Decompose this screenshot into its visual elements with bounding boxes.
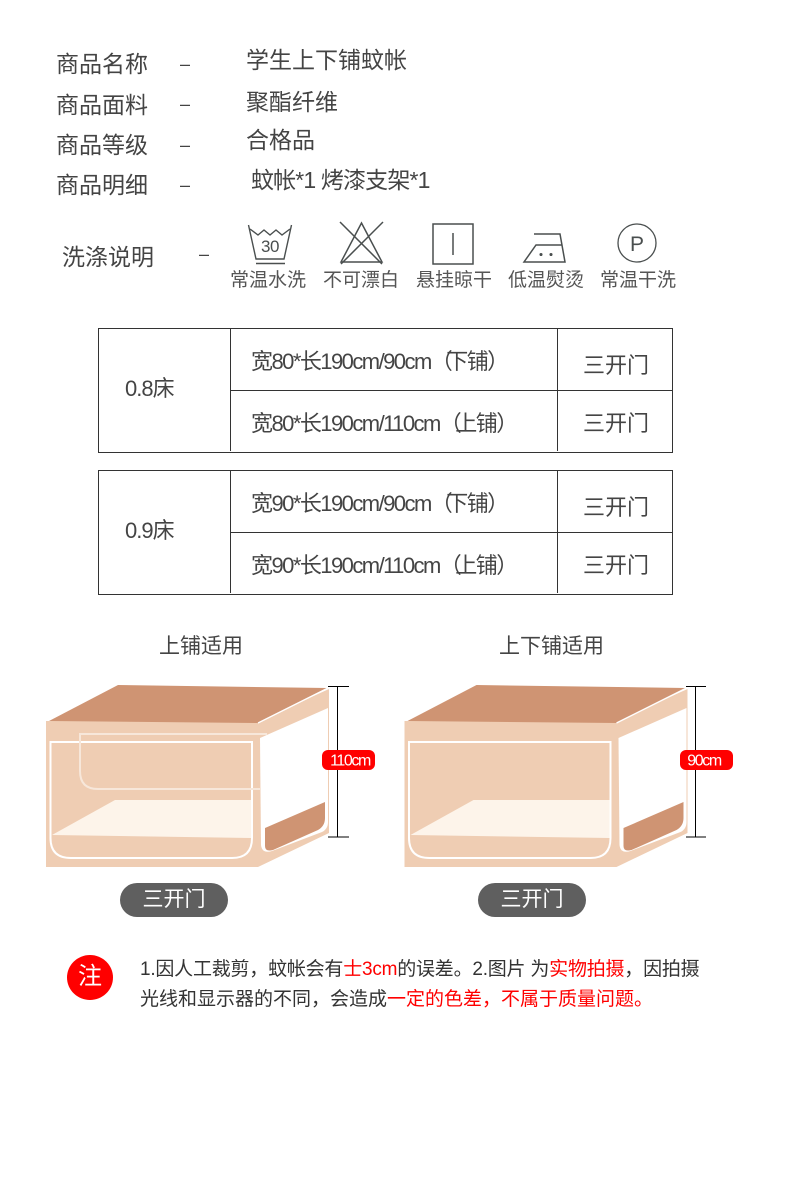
icon: no bleach (340, 222, 383, 264)
note line 2: 光线和显示器的不同，会造成一定的色差，不属于质量问题。 (140, 989, 653, 1010)
washing instructions label: 洗涤说明 (62, 244, 154, 270)
product info list (56, 47, 430, 198)
bed size 0.8: 0.8床 (125, 376, 174, 401)
row: grade value: 合格品 (246, 127, 315, 153)
row: grade dash: – (180, 135, 190, 155)
size table 0.9 (98, 470, 673, 595)
icon: wash tub: 30 (261, 237, 279, 256)
caption: hang dry: 悬挂晾干 (416, 270, 492, 291)
badge: three doors right (478, 883, 586, 917)
icon: dry clean P (618, 224, 656, 262)
diagrams (46, 685, 733, 867)
heading: upper bunk: 上铺适用 (159, 635, 243, 658)
row: name label: 商品名称 (56, 51, 148, 77)
icon: low iron (524, 234, 565, 262)
icon: wash tub (248, 225, 292, 264)
row: fabric label: 商品面料 (56, 92, 148, 118)
door type upper: 三开门 (583, 411, 649, 436)
lower bunk size: 宽90*长190cm/90cm（下铺） (251, 491, 508, 516)
dimension: 90cm (680, 686, 733, 837)
diagram: upper bunk net (46, 685, 329, 867)
note text (140, 958, 699, 1010)
washing dash: – (199, 244, 209, 264)
upper bunk size: 宽90*长190cm/110cm（上铺） (251, 553, 517, 578)
badge: three doors left (120, 883, 228, 917)
icon: hang dry (433, 224, 473, 264)
caption: low iron: 低温熨烫 (508, 270, 584, 291)
row: grade label: 商品等级 (56, 132, 148, 158)
note icon (67, 955, 113, 1000)
dimension: 110cm: 110cm (330, 752, 371, 770)
caption: normal temp wash: 常温水洗 (230, 270, 306, 291)
icon: dry clean P: P (630, 233, 644, 256)
row: contents dash: – (180, 175, 190, 195)
diagram: full bunk net (404, 685, 688, 867)
badge: three doors right: 三开门 (500, 888, 564, 911)
size table 0.8 (98, 328, 673, 453)
note line 1: 1.因人工裁剪，蚊帐会有士3cm的误差。2.图片 为实物拍摄，因拍摄 (140, 959, 699, 980)
row: contents label: 商品明细 (56, 172, 148, 198)
upper bunk size: 宽80*长190cm/110cm（上铺） (251, 411, 517, 436)
dimension: 90cm: 90cm (687, 752, 722, 770)
washing icons (248, 222, 657, 265)
row: fabric dash: – (180, 94, 190, 114)
row: name dash: – (180, 54, 190, 74)
door type lower: 三开门 (583, 495, 649, 520)
note icon: 注 (78, 963, 102, 990)
row: name value: 学生上下铺蚊帐 (246, 47, 407, 73)
row: contents value: 蚊帐*1 烤漆支架*1 (251, 167, 430, 193)
heading: both bunks: 上下铺适用 (499, 635, 604, 658)
dimension: 110cm (322, 686, 375, 837)
badge: three doors left: 三开门 (142, 888, 206, 911)
lower bunk size: 宽80*长190cm/90cm（下铺） (251, 349, 508, 374)
row: fabric value: 聚酯纤维 (246, 89, 338, 115)
caption: dry clean: 常温干洗 (600, 270, 676, 291)
door type lower: 三开门 (583, 353, 649, 378)
icon captions (230, 270, 676, 291)
door type upper: 三开门 (583, 553, 649, 578)
caption: no bleach: 不可漂白 (323, 270, 399, 291)
bed size 0.9: 0.9床 (125, 518, 174, 543)
